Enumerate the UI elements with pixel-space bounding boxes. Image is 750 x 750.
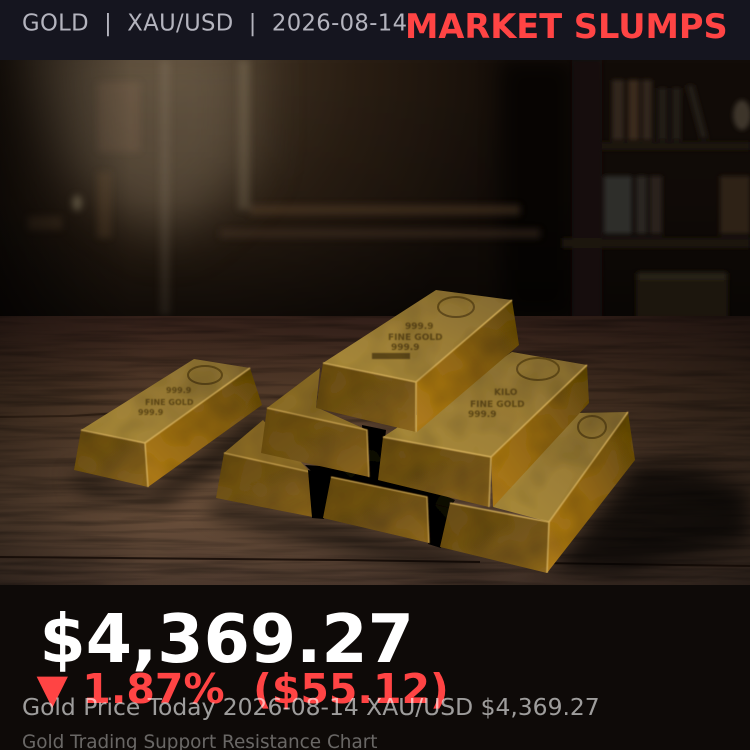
price change: ▼ 1.87% ($55.12) [36,665,449,713]
bar stamp [468,388,525,420]
bar stamp: 999.9 [166,386,192,395]
header status: MARKET SLUMPS [405,7,728,46]
icon: gold bar, top [316,290,519,432]
icon: gold bar, bottom middle [323,477,429,543]
gold bars stack [74,290,635,573]
photo background: dark study room [0,60,709,316]
bar stamp: 999.9 [391,343,419,353]
bar stamp: 999.9 [405,322,433,332]
bar stamp: 999.9 [468,410,496,420]
icon: gold bar, middle right [378,352,589,507]
icon: gold bar, bottom right [440,412,635,573]
caption: price line: Gold Price Today 2026-08-14 XAU/USD $4,369.27 [22,693,600,721]
header label: GOLD | XAU/USD | 2026-08-14 [22,10,407,36]
wooden table [0,316,750,586]
icon: gold bar, left [74,359,262,487]
price value: $4,369.27 [40,600,414,678]
bar stamp [372,322,443,359]
icon: gold bar, middle left [261,368,369,477]
bar stamp: FINE GOLD [470,400,525,410]
bar stamp: KILO [494,388,518,398]
bookshelf at right [562,60,750,318]
icon: gold bar, bottom left [216,420,313,517]
dark gaps between stacked bars [305,425,455,548]
bar stamp: FINE GOLD [388,333,443,343]
bar shadows [70,412,750,578]
bar stamp [138,386,194,417]
bar stamp: 999.9 [138,408,164,417]
header bar [0,0,750,60]
bar stamp: FINE GOLD [145,398,194,407]
bottom dark panel [0,585,750,750]
